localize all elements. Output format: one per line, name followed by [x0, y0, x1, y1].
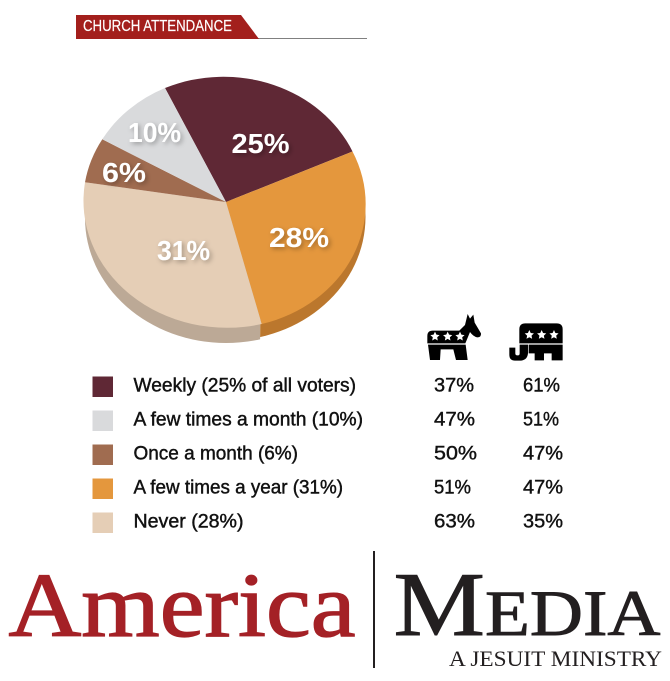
label 25%: 25%: [232, 128, 290, 159]
logo: America Media: [8, 551, 662, 671]
pie side: orange: [260, 210, 366, 338]
legend table: [92, 374, 563, 533]
slice: once a month: [85, 139, 226, 202]
row: once a month: 50%: [434, 444, 477, 464]
divider: [373, 551, 375, 668]
slice: a few times a year: [226, 152, 366, 324]
slice: never: [83, 182, 262, 328]
row: weekly: 37%: [434, 376, 474, 396]
row: a few times a year: A few times a year (31%): [134, 476, 343, 498]
row: weekly: Weekly (25% of all voters): [134, 374, 356, 396]
row: a few times a month: 47%: [434, 410, 475, 430]
row: never: 35%: [523, 512, 563, 532]
wordmark: America: America: [8, 555, 356, 656]
row: never: 63%: [434, 512, 475, 532]
tagline: A JESUIT MINISTRY: [449, 646, 662, 671]
row: a few times a month: A few times a month (10%): [134, 408, 363, 430]
row: a few times a year: 47%: [523, 478, 563, 498]
row: never: Never (28%): [134, 510, 244, 532]
label 6%: 6%: [102, 157, 146, 188]
label 31%: 31%: [157, 235, 210, 266]
row: once a month: 47%: [523, 444, 563, 464]
row: weekly: [92, 374, 560, 397]
slice: a few times a month: [102, 88, 226, 202]
label 28%: 28%: [269, 222, 329, 253]
icon: republican elephant: [509, 323, 563, 361]
pie chart: [83, 77, 367, 343]
row: once a month: Once a month (6%): [134, 442, 298, 464]
row: once a month: [92, 442, 563, 465]
slice: weekly: [165, 77, 352, 202]
banner shape: [76, 15, 259, 39]
row: never: [92, 510, 563, 533]
row: weekly: 61%: [523, 376, 560, 396]
pie side: tan: [85, 200, 260, 343]
row: a few times a year: [92, 476, 563, 499]
row: a few times a year: 51%: [434, 478, 471, 498]
header banner: [76, 15, 367, 39]
wordmark: Media: MEDIA: [394, 554, 661, 655]
label 10%: 10%: [128, 117, 181, 148]
heading: CHURCH ATTENDANCE: [83, 18, 232, 35]
row: a few times a month: 51%: [523, 410, 559, 430]
icon: democratic donkey: [427, 314, 481, 360]
row: a few times a month: [92, 408, 559, 431]
